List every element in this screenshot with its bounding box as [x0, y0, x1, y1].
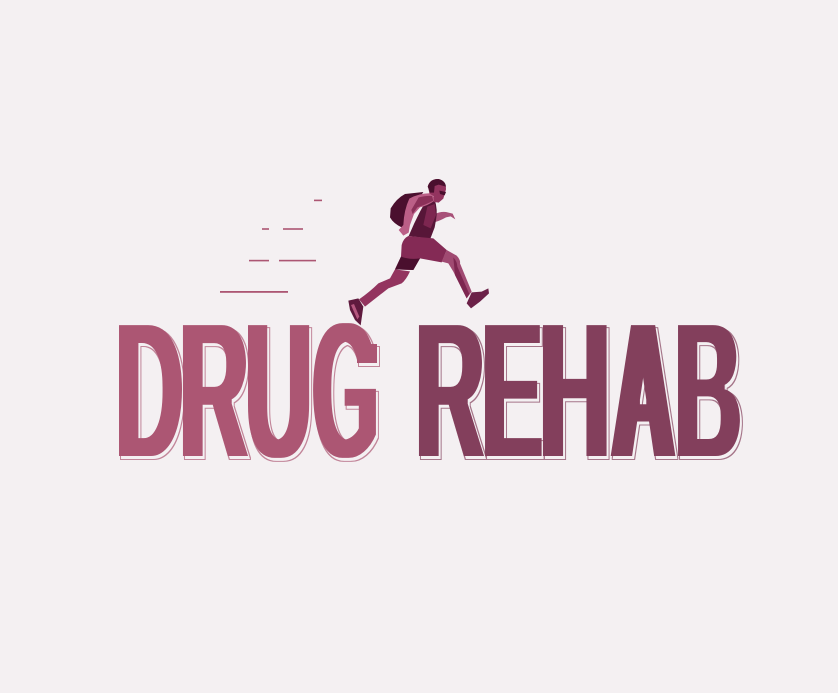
word: DRUG: G: [313, 280, 378, 500]
backpack: [390, 192, 423, 227]
icon: running man: [348, 179, 489, 325]
inner thigh shadow: [395, 257, 420, 270]
front leg: [442, 250, 472, 298]
front arm: [434, 212, 455, 222]
back shoe: [348, 298, 363, 325]
front shoe: [467, 288, 489, 308]
word: DRUG: U: [246, 281, 312, 500]
head: [428, 179, 446, 203]
front leg shadow: [453, 257, 469, 298]
word: REHAB: A: [613, 281, 673, 500]
word: DRUG: [116, 280, 378, 500]
back leg: [359, 269, 410, 307]
hair and glasses: [428, 179, 446, 193]
torso: [409, 198, 437, 241]
word: REHAB: B: [675, 281, 741, 500]
arm shadow: [411, 196, 433, 214]
shoe highlight: [351, 304, 359, 319]
word: REHAB: [416, 281, 741, 500]
rear arm: [399, 193, 435, 236]
word: DRUG: R: [180, 281, 248, 500]
word: REHAB: H: [539, 281, 610, 500]
word: DRUG: D: [116, 280, 183, 500]
shorts: [395, 236, 447, 270]
torso highlight: [423, 204, 436, 228]
speed lines: [220, 200, 322, 293]
word: REHAB: R: [416, 281, 484, 500]
word: REHAB: E: [482, 282, 542, 500]
